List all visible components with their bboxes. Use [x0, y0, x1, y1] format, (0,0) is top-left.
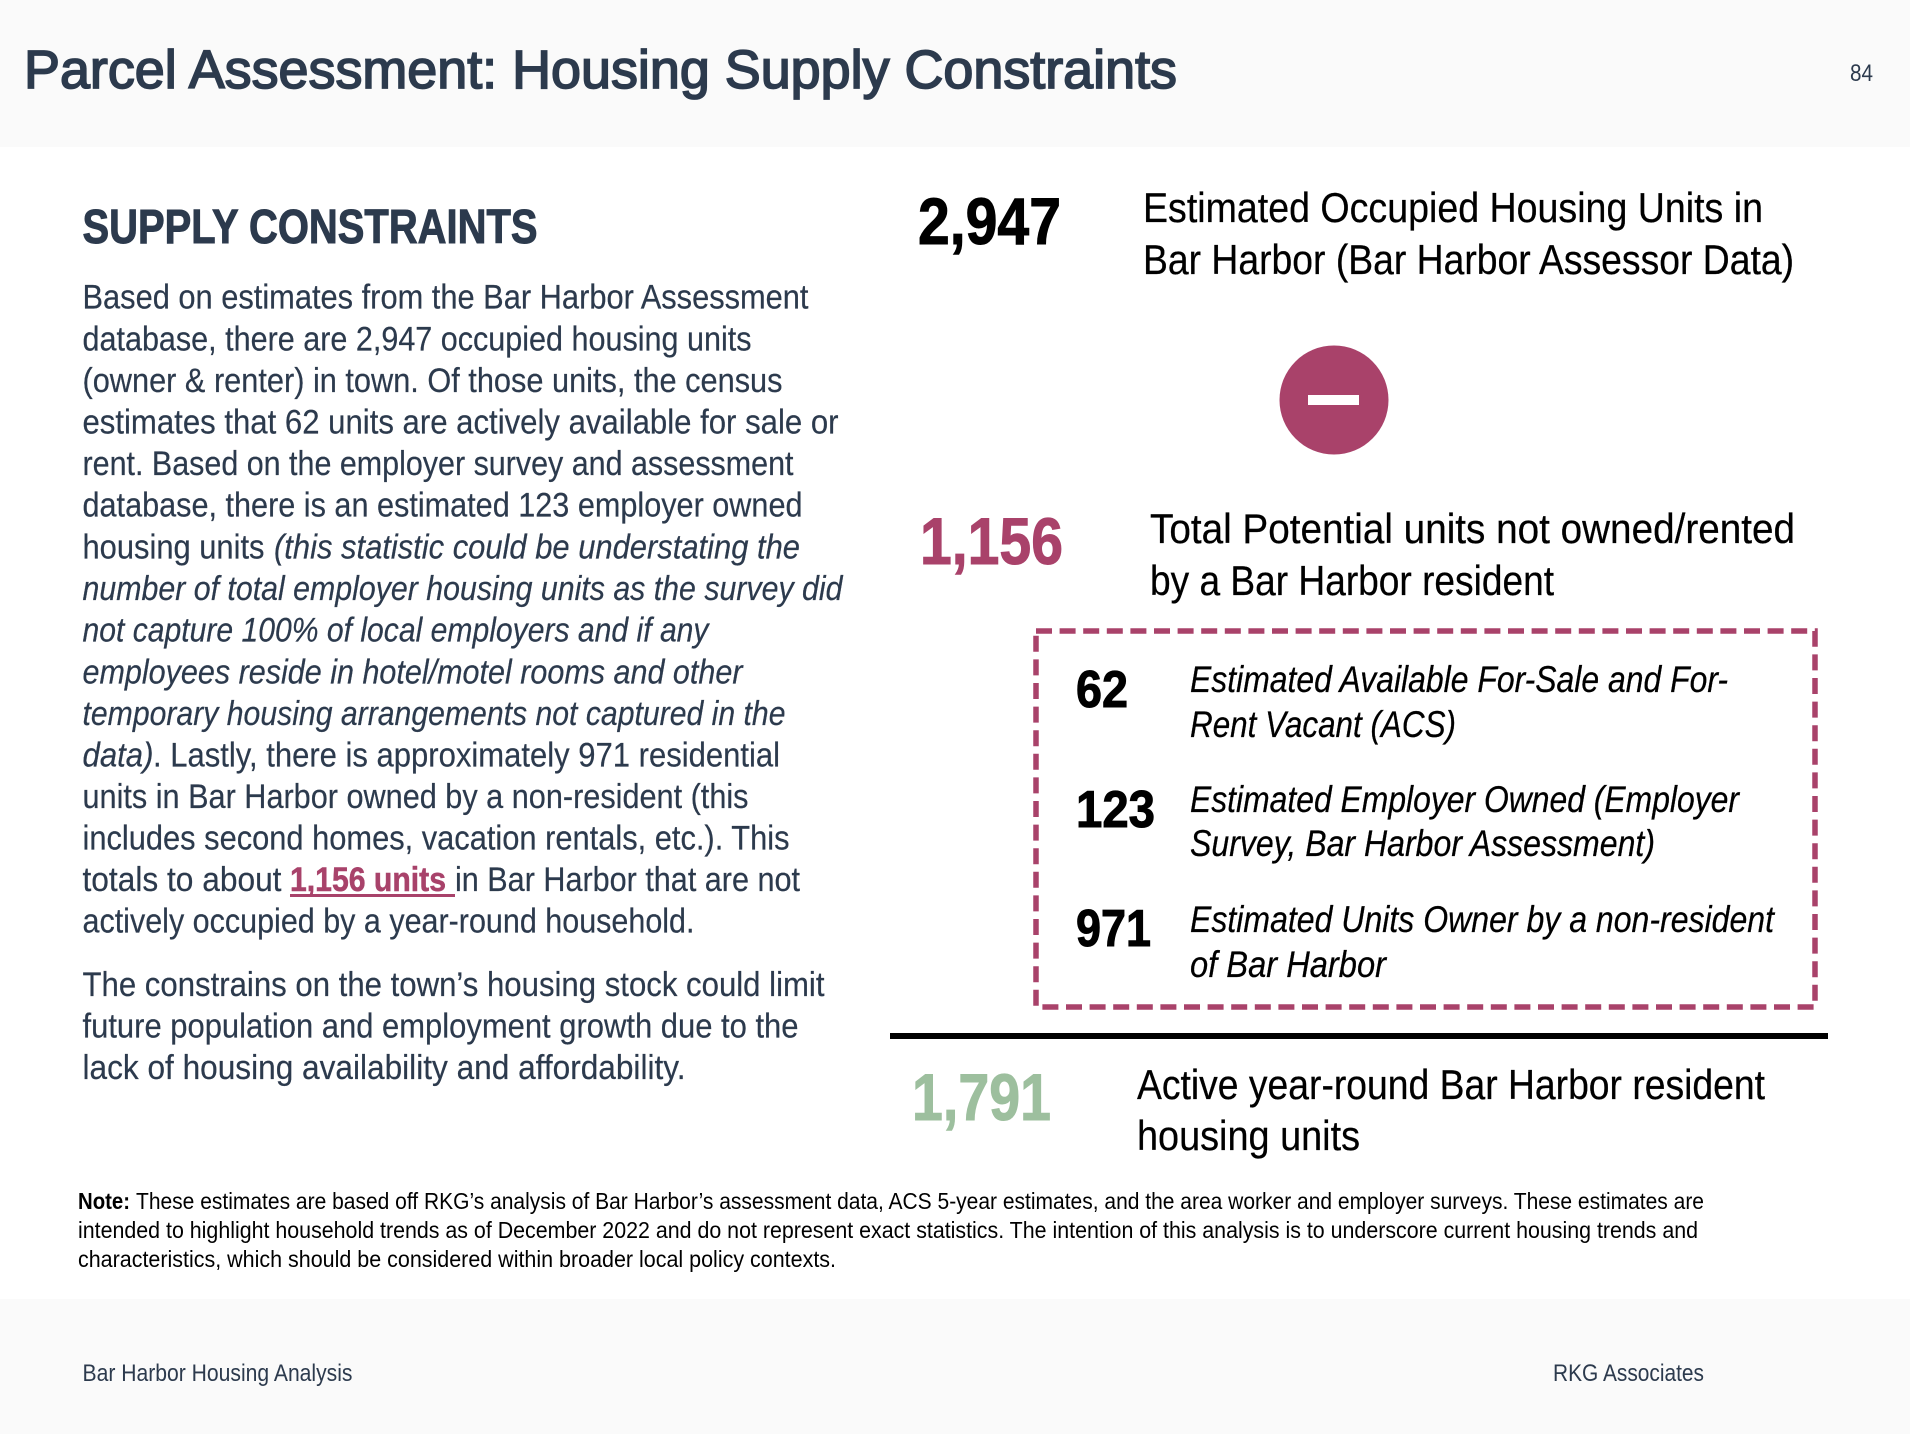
text block: first paragraph: (owner & renter) in town. Of those units, the census	[82, 362, 782, 400]
footer left label: Bar Harbor Housing Analysis	[82, 1360, 352, 1387]
stat: employer owned units: Estimated Employer Owned (Employer	[1190, 779, 1740, 820]
stat: available units	[1076, 659, 1728, 745]
stat: available units: Rent Vacant (ACS)	[1190, 704, 1456, 745]
stat: occupied housing units	[918, 184, 1794, 283]
stat: available units: Estimated Available For-Sale and For-	[1190, 659, 1728, 700]
text block: first paragraph: in Bar Harbor that are not	[455, 861, 800, 899]
subtotal rule	[890, 1033, 1828, 1039]
stat: potential units not owned or rented	[920, 504, 1795, 604]
text block: first paragraph: number of total employer housing units as the survey did	[82, 570, 843, 608]
stat: active year-round units: 1,791	[912, 1060, 1051, 1134]
note: Note:	[78, 1188, 130, 1214]
stat: active year-round units: housing units	[1137, 1112, 1360, 1159]
stat: occupied housing units: Bar Harbor (Bar Harbor Assessor Data)	[1143, 236, 1794, 283]
stat: non-resident owned units: of Bar Harbor	[1190, 944, 1387, 985]
text block: second paragraph: The constrains on the town’s housing stock could limit	[82, 966, 825, 1004]
text block: first paragraph: . Lastly, there is approximately 971 residential	[153, 736, 780, 774]
stat: employer owned units: Survey, Bar Harbor Assessment)	[1190, 823, 1655, 864]
text block: first paragraph: data)	[82, 736, 154, 774]
stat: available units: 62	[1076, 661, 1128, 719]
title: Parcel Assessment: Housing Supply Constraints	[24, 40, 1177, 100]
text block: first paragraph: (this statistic could be understating the	[274, 528, 800, 566]
text block: first paragraph: actively occupied by a year-round household.	[82, 903, 694, 941]
text block: first paragraph: housing units	[82, 528, 264, 566]
page number: 84	[1850, 60, 1873, 87]
text block: first paragraph: Based on estimates from the Bar Harbor Assessment	[82, 279, 809, 317]
stat: employer owned units	[1076, 779, 1740, 864]
note: intended to highlight household trends as of December 2022 and do not represent exact statistics. The intention of this analysis is to underscore current housing trends and	[78, 1217, 1698, 1243]
text block: first paragraph: database, there is an estimated 123 employer owned	[82, 487, 802, 525]
text block: first paragraph: units in Bar Harbor owned by a non-resident (this	[82, 778, 748, 816]
icon: minus sign	[1280, 346, 1388, 454]
stat: non-resident owned units	[1076, 899, 1775, 985]
header band	[0, 0, 1910, 147]
text block: first paragraph: includes second homes, vacation rentals, etc.). This	[82, 820, 790, 858]
stat: potential units not owned or rented: by a Bar Harbor resident	[1150, 557, 1554, 604]
stat: occupied housing units: 2,947	[918, 184, 1061, 258]
stat: non-resident owned units: 971	[1076, 900, 1151, 958]
text block: first paragraph: 1,156 units	[290, 861, 446, 899]
stat: non-resident owned units: Estimated Units Owner by a non-resident	[1190, 899, 1775, 940]
text block: second paragraph: future population and employment growth due to the	[82, 1008, 798, 1046]
footer right label: RKG Associates	[1553, 1360, 1704, 1387]
stat: active year-round units: Active year-round Bar Harbor resident	[1137, 1061, 1765, 1108]
text block: first paragraph: employees reside in hotel/motel rooms and other	[82, 654, 744, 692]
text block: first paragraph: rent. Based on the employer survey and assessment	[82, 445, 794, 483]
text block: first paragraph: database, there are 2,947 occupied housing units	[82, 320, 752, 358]
note: These estimates are based off RKG’s analysis of Bar Harbor’s assessment data, ACS 5-year estimates, and the area worker and employer surveys. These estimates are	[136, 1188, 1704, 1214]
stat: potential units not owned or rented: Total Potential units not owned/rented	[1150, 505, 1795, 552]
text block: first paragraph: estimates that 62 units are actively available for sale or	[82, 404, 838, 442]
stat: occupied housing units: Estimated Occupied Housing Units in	[1143, 184, 1763, 231]
stat: employer owned units: 123	[1076, 781, 1155, 839]
stat: potential units not owned or rented: 1,156	[920, 504, 1063, 578]
text block: first paragraph	[82, 279, 843, 941]
heading: supply constraints: SUPPLY CONSTRAINTS	[82, 201, 538, 254]
text block: second paragraph	[82, 966, 825, 1087]
panel: breakdown dashed box	[1036, 631, 1815, 1007]
note: characteristics, which should be considered within broader local policy contexts.	[78, 1246, 836, 1272]
stat: active year-round units	[912, 1060, 1765, 1159]
footer band	[0, 1299, 1910, 1434]
panel: supply constraints narrative	[82, 201, 843, 1087]
text block: first paragraph: not capture 100% of local employers and if any	[82, 612, 710, 650]
text block: second paragraph: lack of housing availability and affordability.	[82, 1049, 686, 1087]
text block: first paragraph: temporary housing arrangements not captured in the	[82, 695, 786, 733]
note	[78, 1188, 1704, 1272]
text block: first paragraph: totals to about	[82, 861, 282, 899]
